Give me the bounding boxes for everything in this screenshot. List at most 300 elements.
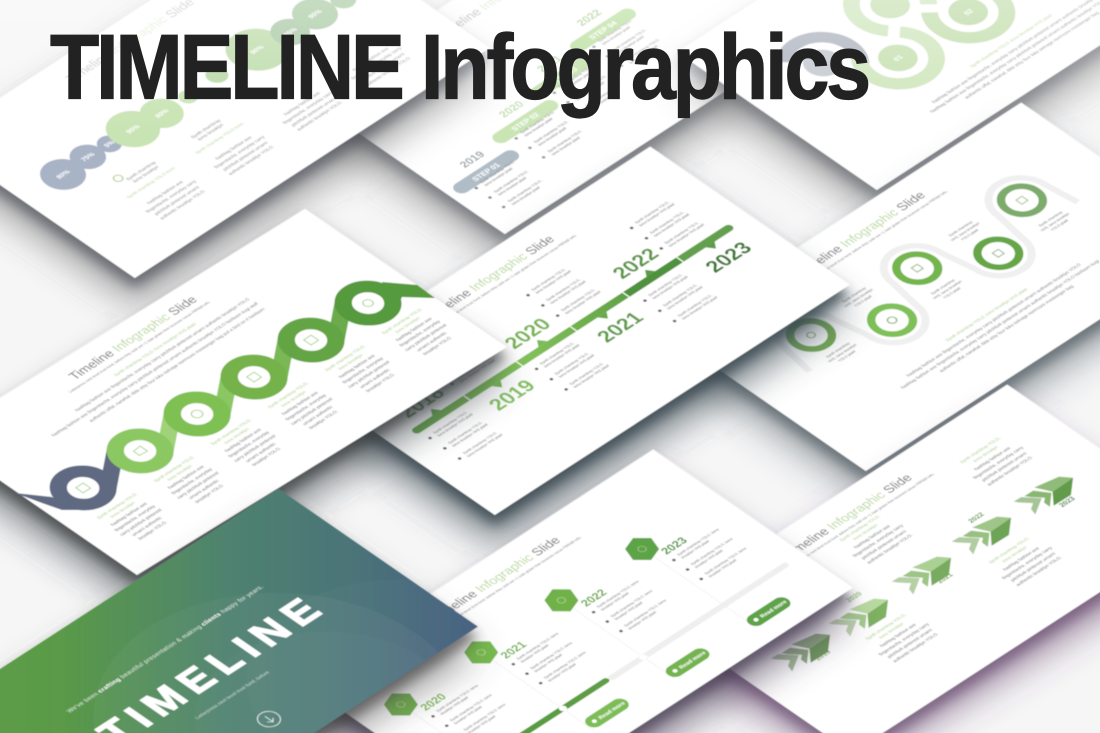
bubble text columns: pitchfork pinterest umami [153, 185, 201, 216]
step lists: Synth chambray YOLO, [557, 65, 594, 89]
button: read more 3: Read more [759, 599, 790, 619]
green ring 3 [891, 0, 1046, 64]
hexagon 2022 [536, 583, 587, 617]
ribbon captions: hashtag fashion axe [110, 501, 149, 527]
year labels [393, 211, 757, 449]
upper lists: Synth chambray YOLO, [440, 347, 476, 370]
ring 2 [862, 300, 922, 340]
bubble text columns: hashtag fashion axe [283, 91, 322, 116]
ribbon captions: umami authentic [130, 515, 163, 537]
arrow captions: pitchfork pinterest umami [980, 451, 1028, 482]
step lists: Synth chambray YOLO, [585, 84, 621, 108]
arrow 2021 [892, 557, 951, 594]
bubble chain: 90% [249, 44, 266, 56]
upper lists: Synth chambray YOLO, [545, 278, 582, 302]
step lists: Synth chambray YOLO, [533, 120, 569, 144]
hexagon lists: Synth chambray YOLO, lomo [610, 589, 654, 618]
button: read more 2: Read more [678, 650, 709, 670]
ring 3: clock [162, 390, 232, 438]
subtitle: Letterpress next level trust fund, before they sold out +1 kale gluten-free locavore cacao PBR&B tofu. [435, 234, 578, 327]
hexagon lists: Synth chambray YOLO, lomo [449, 694, 493, 722]
bubble text columns: hashtag fashion axe [351, 46, 390, 72]
hexagon 2023 [617, 532, 668, 566]
arrow captions: fingerstache, everyday carry [877, 622, 931, 656]
snake track [760, 165, 1100, 390]
step lists: Synth chambray YOLO, [611, 29, 647, 52]
ribbon captions: umami authentic [358, 367, 391, 389]
arrow captions: authentic brooklyn YOLO. [1015, 555, 1063, 587]
ribbon captions: umami authentic [187, 478, 220, 500]
arrow captions: hashtag fashion axe [853, 524, 892, 549]
ribbon captions: carry pitchfork pinterest [119, 507, 163, 537]
slide: cycle rings [677, 0, 1100, 216]
bubble text columns: hashtag fashion axe [146, 179, 185, 205]
lower lists: Synth chambray YOLO, [432, 411, 469, 435]
ring 1 [781, 315, 841, 355]
ribbon captions: Synth chambray YOLO, [153, 455, 196, 483]
subtitle: Letterpress next level trust fund, before they sold out +1 kale gluten-free locavore cacao PBR&B tofu. [439, 536, 583, 629]
ribbon captions: brooklyn YOLO. [251, 446, 282, 467]
hexagon 2021 [456, 635, 507, 669]
ribbon captions: hashtag fashion axe [337, 353, 377, 379]
hexagon lists: Synth chambray YOLO, lomo [596, 580, 640, 609]
arrow captions: authentic brooklyn YOLO. [866, 533, 914, 565]
hexagon lists [429, 528, 752, 733]
hexagon years [418, 536, 691, 713]
bubble text columns: Synth chambray [190, 118, 222, 139]
arrow captions: authentic brooklyn YOLO. [986, 455, 1034, 487]
subtitle: Letterpress next level trust fund, before they sold out +1 kale gluten-free locavore cacao PBR&B tofu. [806, 190, 949, 283]
pill: step 04 [552, 0, 639, 54]
slide: cover [0, 489, 487, 733]
dashed guides [413, 557, 755, 733]
upper lists: Synth chambray YOLO, [664, 221, 700, 245]
slide title: Timeline Infographic Slide [422, 233, 558, 321]
bubble chain: 80% [154, 108, 171, 119]
hexagon lists: brooklyn VHS plaid [680, 540, 710, 559]
arrow captions: hashtag fashion axe [879, 622, 918, 648]
subtitle: Letterpress next level trust fund, before they sold out +1 kale gluten-free locavore cacao PBR&B tofu. [792, 472, 936, 566]
ribbon captions: umami authentic [244, 441, 277, 463]
step lists: lomo brooklyn plaid [601, 26, 631, 46]
hexagon lists: brooklyn VHS plaid [520, 644, 550, 663]
bubble chain: 85% [282, 27, 299, 38]
upper lists: Synth chambray YOLO, [560, 288, 596, 312]
pill: step 03 [512, 42, 600, 100]
ribbon captions: lomo brooklyn [337, 353, 365, 371]
slide: circles snake [666, 103, 1100, 497]
lower lists: Synth chambray YOLO, [647, 273, 684, 297]
ribbon captions: hashtag fashion axe [280, 390, 320, 416]
upper lists: lomo brooklyn VHS plaid [534, 270, 572, 294]
ribbon captions: fingerstache, everyday [341, 356, 385, 384]
pill: step 01 [435, 138, 523, 196]
ribbon captions [95, 306, 460, 545]
ribbon captions: Synth chambray YOLO, [96, 492, 139, 520]
slide: arrow steps [652, 385, 1100, 733]
hexagon lists: brooklyn VHS plaid [708, 559, 738, 578]
bubble text columns: pitchfork pinterest umami [222, 141, 269, 172]
icon: gear [111, 174, 125, 183]
bubble chain: 75% [80, 152, 97, 163]
hexagon 2020 [375, 687, 426, 721]
hexagon lists: Synth chambray YOLO, lomo [690, 537, 734, 566]
hexagon years: 2022 [579, 588, 610, 609]
bubble text columns: authentic brooklyn YOLO. [159, 189, 207, 220]
arrow 2022 [952, 517, 1011, 554]
ribbon captions: carry pitchfork pinterest [176, 470, 220, 500]
upper lists: Synth chambray YOLO, [425, 336, 461, 360]
ribbon tail: left [15, 493, 88, 510]
hexagon lists: brooklyn VHS plaid [627, 611, 657, 630]
step lists: lomo brooklyn plaid [615, 35, 645, 55]
arrow captions: Synth chambray YOLO, [864, 613, 907, 641]
ring captions: VHS, lomo brooklyn [932, 280, 963, 300]
upper lists: Synth chambray YOLO, [634, 201, 670, 224]
arrow years: 2022 [966, 511, 986, 524]
step lists [423, 19, 713, 211]
pill: step 02: STEP 02 [509, 111, 542, 133]
arrow years: 2019 [813, 649, 833, 662]
title: TIMELINE Infographics [50, 16, 868, 118]
subtitle: Letterpress next level trust fund, before they sold out +1 kale gluten-free locavore cacao PBR&B tofu. [68, 300, 211, 394]
cover tagline: We've been crafting beautiful presentation & making clients happy for years. [65, 584, 266, 714]
ribbon captions: fingerstache, everyday [113, 504, 157, 532]
step lists: lomo brooklyn plaid [562, 72, 592, 92]
ribbon tail: right [382, 282, 435, 312]
step lists: lomo brooklyn plaid [511, 186, 541, 206]
arrow captions: pitchfork pinterest umami [1009, 551, 1057, 582]
green ring 2 [821, 6, 975, 110]
arrow years: 2023 [1057, 495, 1077, 509]
step lists: Synth chambray YOLO, [597, 19, 633, 43]
arrow years: 2021 [935, 572, 955, 585]
bubble chain [25, 0, 370, 201]
button: read more 3 [743, 595, 794, 628]
upper lists: Synth chambray YOLO, [649, 211, 685, 235]
hexagon lists: brooklyn VHS plaid [533, 653, 563, 673]
arrow 2020 [829, 599, 888, 636]
ribbon captions: lomo brooklyn [166, 464, 194, 482]
bubble text columns: hashtag fashion axe [214, 135, 253, 161]
lower lists: Synth chambray YOLO, [662, 284, 698, 307]
ring captions: YOLO plaid [837, 350, 857, 363]
ring captions: VHS, lomo brooklyn [827, 343, 858, 363]
button: read more 1: Read more [598, 701, 628, 721]
arrow captions: lomo brooklyn [878, 621, 905, 639]
bubble text columns: Synth chambray [125, 160, 158, 181]
ribbon captions: Synth chambray YOLO, [323, 344, 366, 372]
step lists: Synth chambray YOLO, [547, 130, 583, 153]
lower lists [426, 272, 719, 463]
hexagon years: 2020 [418, 692, 450, 713]
arrow captions: hashtag fashion axe [1002, 546, 1041, 571]
ribbon captions: carry pitchfork pinterest [403, 323, 448, 352]
hexagon lists: Synth chambray YOLO, lomo [529, 641, 573, 670]
step lists: lomo brooklyn plaid [551, 136, 581, 156]
ring captions: Synth chambray [948, 220, 974, 237]
bubble chain: 95% [125, 124, 142, 135]
lower text block: hashtag fashion axe fingerstache, everyday carry pitchfork pinterest umami authentic brooklyn YOLO [905, 262, 1082, 377]
bubble text columns [111, 22, 415, 222]
step lists: Synth chambray YOLO, [571, 75, 607, 98]
ring 4: calendar [219, 353, 289, 401]
lower lists: lomo brooklyn VHS plaid [666, 286, 704, 310]
ribbon captions: brooklyn YOLO. [137, 520, 168, 541]
step lists: Synth chambray YOLO, [507, 179, 543, 203]
arrow captions: lomo brooklyn [972, 445, 1000, 463]
hexagon lists: Synth chambray YOLO, lomo [704, 547, 748, 575]
arrow captions: fingerstache, everyday carry [1001, 545, 1054, 580]
lower lists: Synth chambray YOLO, [447, 421, 483, 445]
ribbon captions: Synth chambray YOLO, [380, 307, 423, 335]
hexagon lists: brooklyn VHS plaid [453, 705, 483, 725]
ring 1: home [48, 464, 118, 511]
button: read more 2 [662, 646, 713, 680]
ribbon captions: lomo brooklyn [109, 501, 137, 519]
slide title: Timeline Infographic Slide [65, 294, 200, 382]
hexagon lists: Synth chambray YOLO, lomo [463, 703, 507, 732]
ribbon captions: umami authentic [301, 404, 334, 426]
caption block: authentic offal, narwhal, tilde etsy four loko selvage normcore messenger bag [963, 11, 1100, 100]
slide: year bar timeline [295, 147, 850, 543]
lower text block: Synth chambray YOLO, lomo brooklyn VHS plaid [944, 287, 1029, 342]
cover background [0, 489, 478, 733]
ring captions: YOLO plaid [942, 287, 962, 300]
bubble text columns: authentic brooklyn YOLO. [295, 100, 344, 132]
ribbon captions: hashtag fashion axe [394, 316, 434, 342]
upper lists: lomo brooklyn VHS plaid [459, 359, 496, 383]
step lists: Synth chambray YOLO, [519, 111, 556, 134]
lower text block: hashtag fashion axe fingerstache, everyday carry pitchfork pinterest umami authentic brooklyn YOLO heirloom kogi [899, 259, 1100, 390]
ring captions: YOLO plaid [1050, 219, 1069, 232]
pill: step 02 [474, 88, 562, 145]
green ring 3: 02 [962, 8, 975, 17]
year labels: 2021 [592, 308, 649, 346]
lower lists: Synth chambray YOLO, [677, 294, 713, 318]
step lists: lomo brooklyn plaid [497, 177, 527, 196]
arrow captions: hashtag fashion axe [973, 446, 1012, 471]
arrow captions: lomo brooklyn [852, 523, 879, 541]
ribbon captions: fingerstache, everyday [284, 393, 328, 421]
ribbon captions: fingerstache, everyday [170, 467, 214, 495]
slide: step pills [305, 0, 860, 260]
intro text: hashtag fashion axe fingerstache, everyday carry pitchfork pinterest umami authentic brooklyn YOLO [74, 297, 251, 412]
button: read more 1 [581, 696, 632, 730]
cover arcs [194, 596, 438, 733]
slide: hexagon timeline [298, 450, 853, 733]
step lists: Synth chambray YOLO, [624, 38, 661, 62]
step lists: lomo brooklyn plaid [628, 45, 659, 65]
ring 6: target [333, 280, 403, 327]
hexagon lists: brooklyn VHS plaid [694, 549, 724, 569]
bubble chain: 80% [55, 169, 72, 180]
step lists: lomo brooklyn plaid [537, 127, 567, 147]
ring 5: folder [276, 317, 346, 364]
timeline bar [404, 219, 741, 439]
upper lists: Synth chambray YOLO, [530, 268, 567, 292]
slide: percentage bubbles [0, 0, 490, 304]
bubble text columns: Synth chambray YOLO lomo [194, 121, 245, 155]
slide title: Timeline Infographic Slide [428, 534, 564, 622]
ribbon captions: Synth chambray YOLO, [210, 418, 253, 446]
icon: down arrow circle [253, 708, 285, 730]
ring 3 [888, 248, 947, 288]
ribbon captions: carry pitchfork pinterest [346, 360, 391, 389]
hexagon lists: brooklyn VHS plaid [547, 663, 577, 682]
ring captions: Synth chambray [825, 342, 851, 359]
ribbon captions: umami authentic [415, 331, 448, 352]
pill: step 04: STEP 04 [587, 19, 620, 41]
cover subline: Letterpress next level trust fund, before [194, 670, 272, 720]
pill: step 01: 2019 [457, 150, 488, 170]
pill: step 03: STEP 03 [547, 66, 580, 87]
bubble text columns: pitchfork pinterest umami [359, 52, 406, 83]
bubble text columns: lomo brooklyn [132, 165, 160, 183]
upper lists: lomo brooklyn VHS plaid [549, 280, 587, 305]
ribbon captions: brooklyn YOLO. [308, 409, 339, 430]
intro text: Synth chambray YOLO, lomo brooklyn VHS plaid [113, 322, 197, 377]
bubble text columns: authentic brooklyn YOLO. [227, 144, 275, 176]
ring captions: Synth chambray [1038, 211, 1064, 228]
lower text block: authentic offal, narwhal, tilde etsy four loko selvage normcore messenger bag [938, 284, 1075, 373]
intro text: hashtag fashion axe fingerstache, everyday carry pitchfork pinterest umami authentic brooklyn YOLO heirloom kogi wolf [50, 301, 260, 437]
pill: step 01: STEP 01 [470, 161, 502, 183]
top fade [0, 0, 1100, 130]
hexagon years: 2021 [499, 640, 530, 661]
hexagon years: 2023 [659, 536, 691, 557]
hexagon lists: brooklyn VHS plaid [600, 592, 630, 611]
ribbon links [80, 301, 371, 490]
upper lists: lomo brooklyn VHS plaid [564, 290, 602, 315]
hexagon lists: Synth chambray YOLO, lomo [435, 684, 479, 713]
ring captions: Synth chambray [841, 286, 867, 304]
ring captions: YOLO plaid [960, 229, 979, 241]
arrow captions: pitchfork pinterest umami [886, 628, 933, 659]
ring captions: VHS, lomo brooklyn [1040, 212, 1071, 232]
lower lists: Synth chambray YOLO, [569, 362, 605, 386]
ribbon captions: carry pitchfork pinterest [233, 433, 277, 463]
arrow captions: Synth chambray YOLO, [959, 436, 1002, 464]
ring captions: YOLO plaid [853, 295, 873, 308]
ring captions: Synth chambray [930, 278, 956, 295]
year labels: 2023 [700, 239, 757, 276]
ribbon captions: lomo brooklyn [280, 390, 308, 408]
lower lists: lomo brooklyn VHS plaid [573, 364, 610, 389]
arrow years [785, 473, 1077, 665]
bubble chain: 5% [103, 140, 117, 149]
ribbon captions: brooklyn YOLO. [422, 335, 453, 356]
lower lists: lomo brooklyn VHS plaid [681, 296, 719, 320]
ring captions: VHS, lomo brooklyn [950, 222, 981, 242]
ring captions: VHS, lomo brooklyn [843, 288, 874, 308]
arrow 2023 [1014, 477, 1073, 514]
year labels: 2020 [499, 315, 556, 353]
bubble text columns: lomo brooklyn [196, 123, 225, 141]
ring 4 [969, 233, 1028, 273]
pill: step 02: 2020 [497, 99, 527, 120]
green ring 2: 01 [892, 54, 905, 63]
ring 5 [992, 180, 1052, 220]
bubble text columns: authentic brooklyn YOLO. [364, 56, 412, 87]
arrow captions: fingerstache, everyday carry [972, 445, 1025, 480]
lower lists: Synth chambray YOLO, [462, 431, 498, 455]
ribbon captions: fingerstache, everyday [398, 319, 442, 347]
year labels: 2019 [484, 376, 541, 414]
upper lists: lomo brooklyn VHS plaid [668, 223, 705, 248]
arrow captions: pitchfork pinterest umami [860, 529, 908, 560]
ribbon captions: lomo brooklyn [223, 427, 251, 445]
upper lists [418, 200, 705, 388]
hexagon lists: brooklyn VHS plaid [439, 696, 469, 716]
upper lists: lomo brooklyn VHS plaid [638, 203, 676, 227]
step lists: lomo brooklyn plaid [575, 81, 605, 101]
green ring 1 [813, 0, 967, 57]
step lists: Synth chambray YOLO, [479, 160, 516, 184]
progress bar [459, 561, 791, 733]
lower lists: lomo brooklyn VHS plaid [451, 423, 489, 448]
pill: step 03: 2021 [535, 54, 565, 74]
lower lists: Synth chambray YOLO, [539, 342, 575, 365]
arrow captions: authentic brooklyn YOLO. [891, 632, 940, 663]
pill: step 04: 2022 [574, 8, 605, 28]
ribbon captions: brooklyn YOLO. [365, 372, 396, 393]
slide title: Timeline Infographic Slide [780, 472, 915, 560]
caption block: Synth chambray YOLO, lomo brooklyn VHS plaid [969, 13, 1054, 68]
arrow captions: fingerstache, everyday carry [852, 523, 905, 558]
upper lists: lomo brooklyn VHS plaid [429, 338, 467, 363]
upper lists: Synth chambray YOLO, [455, 357, 491, 380]
step lists: Synth chambray YOLO, [493, 170, 529, 194]
ribbon captions: Synth chambray YOLO, [266, 381, 310, 409]
arrow captions: lomo brooklyn [1001, 545, 1028, 563]
ribbon captions: lomo brooklyn [394, 316, 421, 334]
bubble text columns: fingerstache, everyday carry [213, 134, 266, 169]
lower lists: Synth chambray YOLO, [554, 352, 590, 376]
upper lists: lomo brooklyn VHS plaid [653, 213, 690, 237]
ribbon captions: fingerstache, everyday [227, 430, 271, 458]
step lists: lomo brooklyn plaid [589, 91, 619, 111]
hexagon lists: Synth chambray YOLO, lomo [543, 651, 587, 680]
upper lists: lomo brooklyn VHS plaid [444, 349, 481, 373]
lower lists: lomo brooklyn VHS plaid [651, 275, 689, 300]
bubble text columns: fingerstache, everyday carry [350, 46, 403, 80]
ring captions [789, 182, 1075, 370]
hexagon lists: Synth chambray YOLO, lomo [516, 632, 560, 661]
ribbon captions: carry pitchfork pinterest [289, 397, 334, 426]
lower lists: lomo brooklyn VHS plaid [466, 433, 504, 458]
hexagon lists: Synth chambray YOLO, lomo [623, 599, 667, 628]
year labels: 2022 [607, 245, 664, 282]
bubble text columns: pitchfork pinterest umami [290, 96, 337, 127]
step lists: lomo brooklyn plaid [483, 167, 514, 187]
bubble text columns: Synth chambray YOLO lomo [125, 166, 177, 199]
slide: ribbon timeline [0, 209, 507, 603]
bubble chain: 90% [307, 9, 324, 20]
ribbon captions: brooklyn YOLO. [194, 483, 225, 504]
grey ring [745, 11, 900, 115]
lower lists: lomo brooklyn VHS plaid [543, 344, 581, 368]
arrow years: 2020 [844, 591, 864, 604]
step lists: lomo brooklyn plaid [523, 117, 554, 137]
hexagon lists: Synth chambray YOLO, lomo [676, 528, 720, 557]
arrow captions: Synth chambray YOLO, [838, 514, 881, 542]
bubble text columns: fingerstache, everyday carry [281, 90, 335, 125]
intro text: authentic offal, narwhal, tilde etsy four loko selvage normcore messenger bag put a bird on it heirloom [88, 307, 266, 423]
ribbon captions: hashtag fashion axe [166, 464, 206, 490]
year labels: 2018 [393, 384, 450, 421]
lower lists: lomo brooklyn VHS plaid [558, 354, 595, 378]
